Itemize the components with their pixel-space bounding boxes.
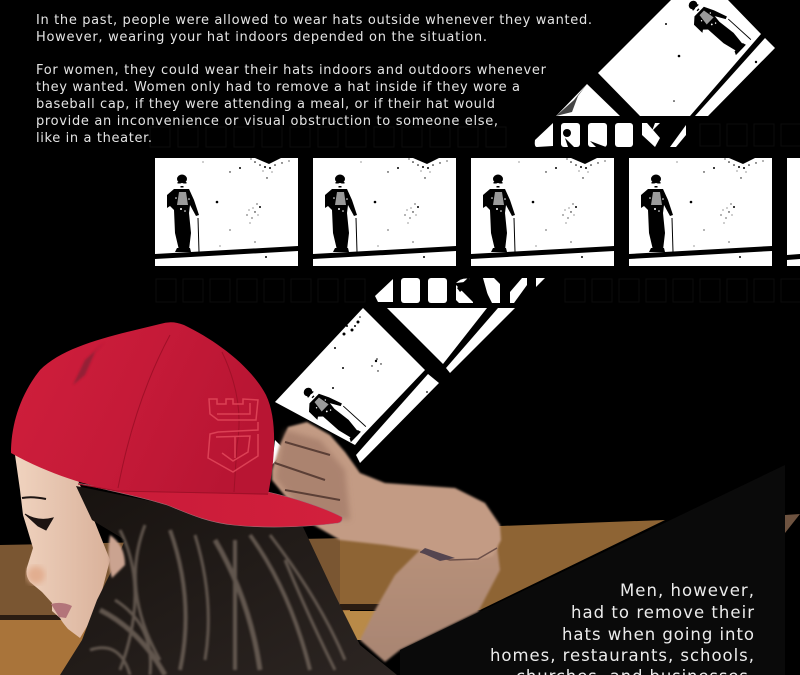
film strip: upper diagonal [535,0,775,147]
woman with red cap [11,322,501,675]
wooden bench background [0,514,800,675]
hair strands [90,525,345,675]
film frame 3 [471,158,614,266]
cap shading and seams [78,335,268,494]
sprocket holes: lower band [375,278,545,303]
finger lines [275,442,340,500]
text block: rules for men: had to remove their [571,603,754,622]
paragraph: rules for women: they wanted. Women only had to remove a hat inside if they wore a [36,80,520,95]
text block: rules for men: Men, however, [620,581,754,600]
upper arm and shoulder [360,546,500,662]
film frame 4 [629,158,772,266]
film frame: upper diagonal large [598,0,761,116]
paragraph: rules for women: baseball cap, if they were attending a meal, or if their hat would [36,97,495,112]
paragraph: general rule: In the past, people were allowed to wear hats outside whenever they wanted. [36,13,592,28]
text block: rules for men: homes, restaurants, schools, [490,646,754,665]
forearm and hand [272,422,501,561]
arm crease [420,548,497,560]
dark triangle panel [400,465,785,675]
ear highlight [108,535,125,578]
lips [51,603,72,618]
cap crown [11,322,274,495]
paragraph: rules for women: like in a theater. [36,131,152,146]
film strip: horizontal row of frames [155,158,800,266]
cap logo: crown and shield [208,399,258,472]
film frame 2 [313,158,456,266]
film frame 5 [787,158,800,266]
nose shadow [27,566,45,584]
eye and eyebrow [22,497,53,530]
chaplin figure: lower diagonal [296,378,366,447]
film frame 1 [155,158,298,266]
faint sprocket holes on black [150,124,800,302]
text block: past rules [36,13,592,146]
paragraph: rules for women [36,63,547,146]
face [15,455,110,638]
hand shading [275,430,350,520]
paragraph: rules for women: provide an inconvenience or visual obstruction to someone else, [36,114,498,129]
film strip: lower diagonal [272,308,515,465]
paragraph: general rule: However, wearing your hat indoors depended on the situation. [36,30,487,45]
chaplin figure: upper diagonal [681,0,751,60]
sprocket holes: upper diagonal [535,123,686,147]
cap brim [78,483,342,527]
text block: rules for men [490,581,754,675]
text block: rules for men: hats when going into [562,625,754,644]
paragraph: rules for women: For women, they could wear their hats indoors and outdoors whenever [36,63,547,78]
film frame: lower diagonal large [275,308,425,445]
paragraph: general rule [36,13,592,45]
hair [60,486,397,675]
